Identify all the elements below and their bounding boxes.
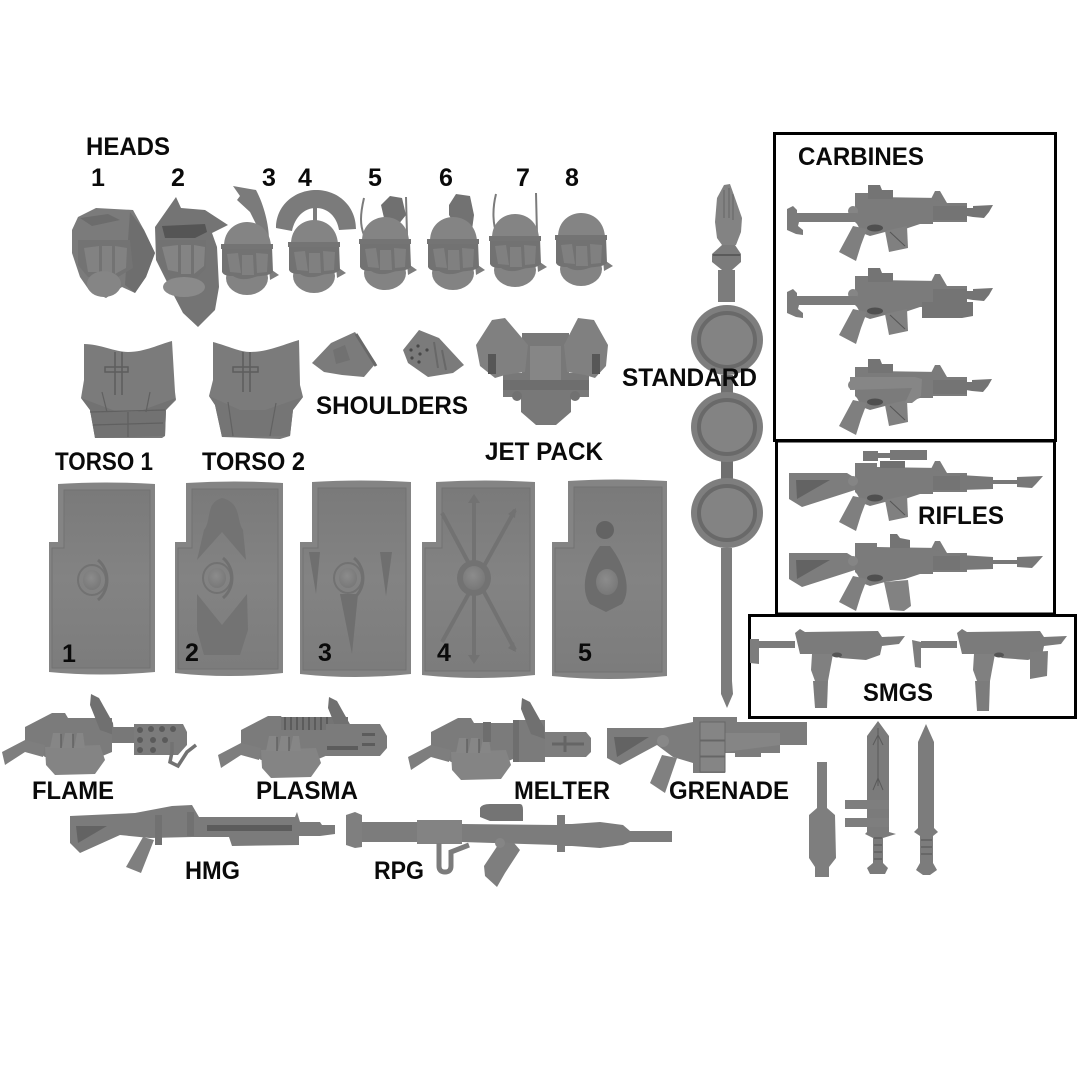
- head 2: wolf pelt: [155, 197, 228, 327]
- head numbers: 8: [565, 164, 579, 192]
- heading: heads: HEADS: [86, 133, 170, 161]
- dagger: [914, 724, 938, 875]
- part labels: TORSO 2: [202, 448, 305, 476]
- shield 5: [552, 480, 667, 679]
- panel: carbines: CARBINES: [798, 143, 924, 171]
- label: melter: MELTER: [514, 777, 610, 805]
- label: rpg: RPG: [374, 857, 424, 885]
- label: standard: STANDARD: [622, 364, 757, 392]
- part labels: JET PACK: [485, 438, 603, 466]
- part labels: SHOULDERS: [316, 392, 468, 420]
- shield 4: 4: [437, 639, 451, 667]
- head 5: plumed helmet: [359, 196, 417, 290]
- label: plasma: PLASMA: [256, 777, 358, 805]
- rocket: [809, 762, 836, 877]
- standard pole: [691, 184, 763, 708]
- weapon: melter: [408, 698, 591, 780]
- head 1: lion pelt: [72, 208, 155, 298]
- panel: rifles: RIFLES: [918, 502, 1004, 530]
- head numbers: 5: [368, 164, 382, 192]
- part labels: TORSO 1: [55, 448, 153, 476]
- head 4: arc crest helmet: [276, 190, 356, 293]
- head numbers: 7: [516, 164, 530, 192]
- head 7: wired helmet: [489, 193, 547, 287]
- part labels: [55, 392, 603, 476]
- weapon: hmg: [70, 805, 335, 873]
- label: hmg: HMG: [185, 857, 240, 885]
- shield 4: [422, 480, 535, 678]
- label: flame: FLAME: [32, 777, 114, 805]
- head 3: transverse crest helmet: [221, 186, 279, 295]
- panel: smgs: [750, 616, 1076, 718]
- head numbers: 1: [91, 164, 105, 192]
- weapon: plasma: [218, 697, 387, 778]
- shield 1: 1: [62, 640, 76, 668]
- head numbers: 6: [439, 164, 453, 192]
- shield 5: 5: [578, 639, 592, 667]
- label: grenade: GRENADE: [669, 777, 789, 805]
- shield 3: [300, 480, 411, 677]
- panel: carbines: [774, 134, 1056, 440]
- torso 1: [81, 341, 176, 438]
- head numbers: [91, 164, 579, 192]
- weapon: rpg: [346, 804, 672, 887]
- weapon: grenade launcher: [607, 717, 807, 793]
- shield 2: 2: [185, 639, 199, 667]
- panel: rifles: [776, 441, 1054, 614]
- sword: [845, 721, 896, 874]
- head numbers: 2: [171, 164, 185, 192]
- weapon: flamer: [2, 694, 196, 775]
- torso 2: [209, 340, 303, 439]
- head numbers: 4: [298, 164, 312, 192]
- head numbers: 3: [262, 164, 276, 192]
- shield 2: [175, 482, 283, 676]
- shoulder pad 1: [312, 332, 376, 377]
- shield 3: 3: [318, 639, 332, 667]
- shoulder pad 2: [403, 330, 464, 377]
- shield 1: [49, 482, 155, 674]
- jet pack: [476, 318, 608, 425]
- panel: smgs: SMGS: [863, 679, 933, 707]
- head 6: plumed helmet: [427, 194, 485, 290]
- head 8: plain helmet: [555, 213, 613, 286]
